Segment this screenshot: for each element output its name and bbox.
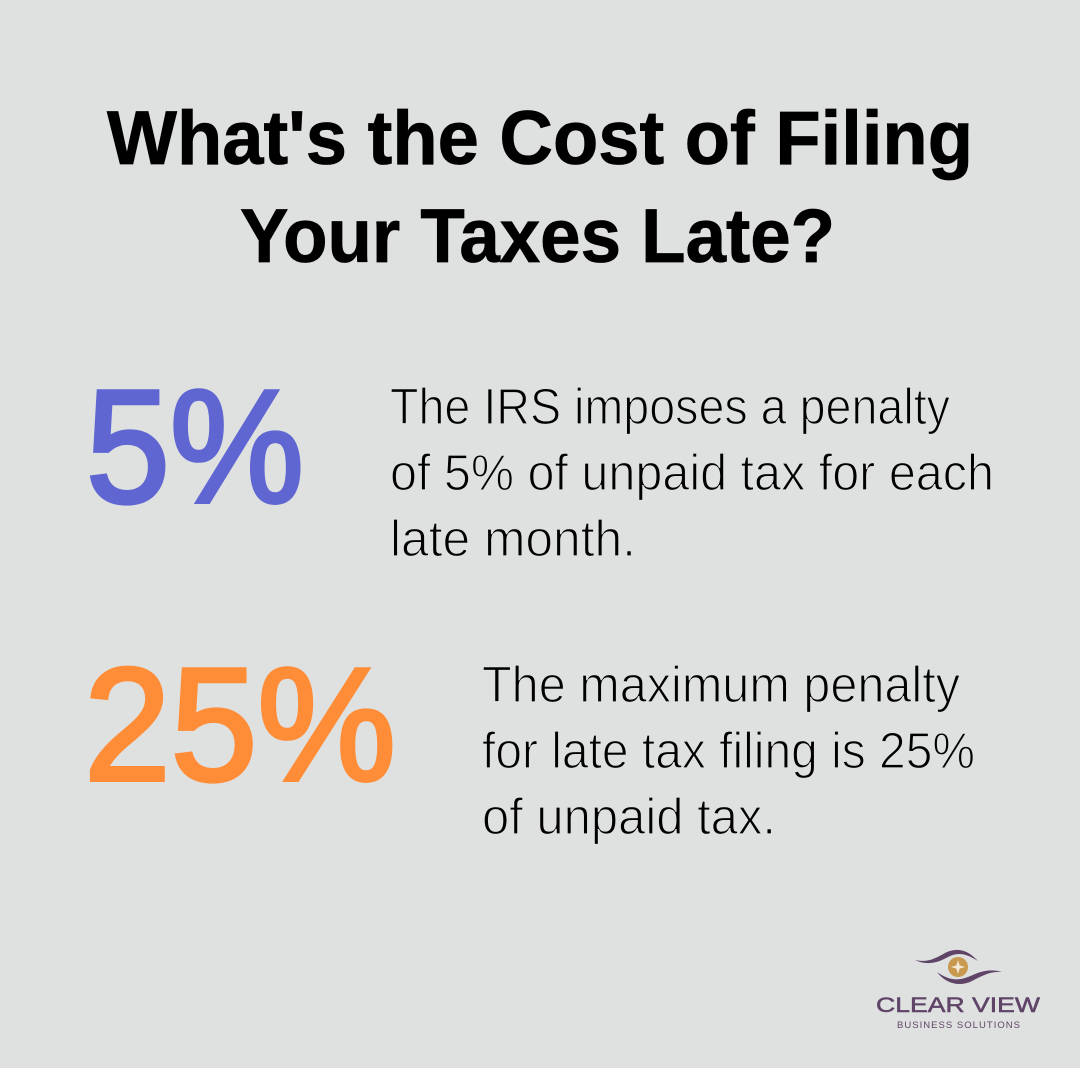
title: What's the Cost of Filing bbox=[107, 96, 973, 181]
logo wordmark: CLEAR VIEW bbox=[876, 994, 1040, 1017]
statistic: 25%: 25% bbox=[84, 635, 396, 815]
icon: eye bbox=[915, 950, 1002, 984]
description: maximum penalty: for late tax filing is 25% bbox=[482, 722, 975, 779]
description: 5% penalty: late month. bbox=[390, 510, 636, 567]
title: Your Taxes Late? bbox=[240, 194, 835, 279]
description: 5% penalty bbox=[390, 378, 994, 567]
description: maximum penalty: The maximum penalty bbox=[482, 656, 960, 713]
logo: Clear View Business Solutions bbox=[876, 950, 1040, 1031]
description: 5% penalty: The IRS imposes a penalty bbox=[390, 378, 950, 435]
description: maximum penalty: of unpaid tax. bbox=[482, 788, 776, 845]
description: maximum penalty bbox=[482, 656, 975, 845]
title bbox=[107, 96, 973, 279]
logo tagline: BUSINESS SOLUTIONS bbox=[897, 1020, 1020, 1031]
statistic: 5%: 5% bbox=[86, 357, 304, 537]
description: 5% penalty: of 5% of unpaid tax for each bbox=[390, 444, 994, 501]
